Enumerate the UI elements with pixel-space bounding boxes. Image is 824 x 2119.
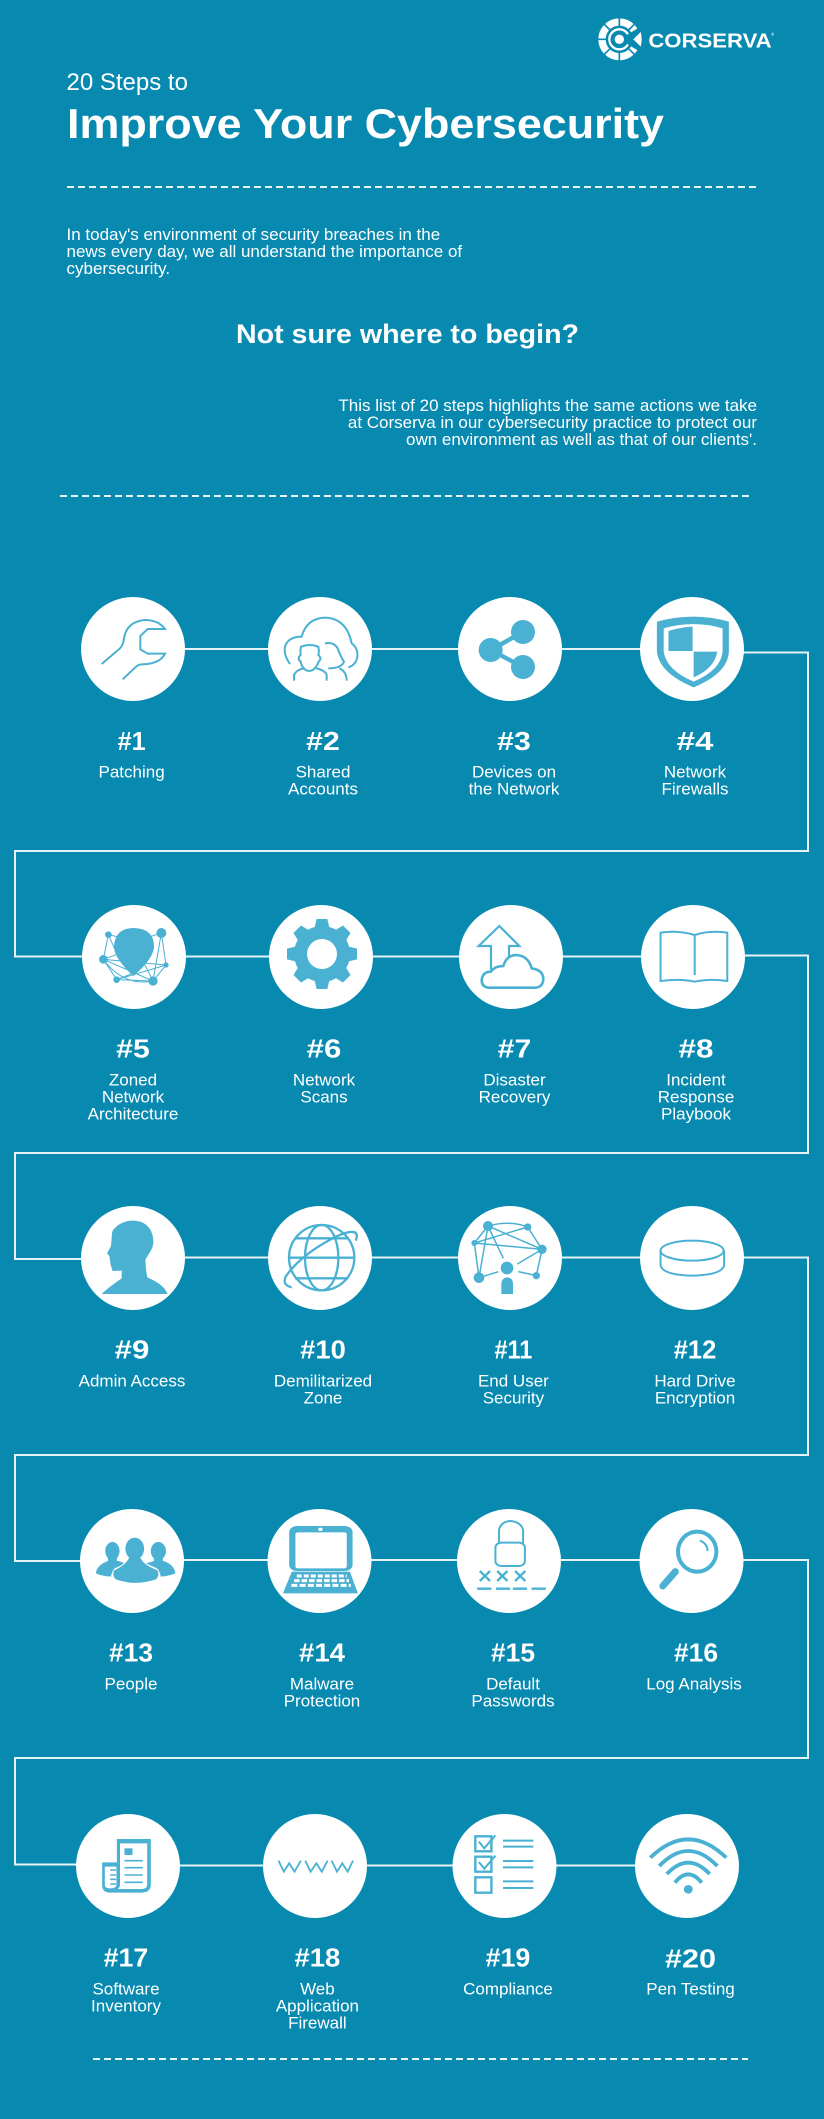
step 7: Disaster Recovery — [459, 905, 563, 1107]
number: #2 — [306, 726, 340, 756]
label: Zone — [304, 1389, 342, 1408]
label: Network — [102, 1088, 165, 1107]
title: Improve Your Cybersecurity — [67, 100, 665, 147]
number: #7 — [498, 1034, 531, 1064]
number: #17 — [104, 1943, 148, 1973]
icon: document — [102, 1839, 151, 1893]
label: Shared — [296, 763, 350, 782]
icon: globe with orbit — [285, 1225, 357, 1290]
label: Application — [276, 1997, 359, 2016]
label: Demilitarized — [274, 1372, 372, 1391]
step 13: People — [80, 1509, 184, 1694]
label: Scans — [300, 1088, 348, 1107]
label: Devices on — [472, 763, 556, 782]
step 17: Software Inventory — [76, 1814, 180, 2016]
step 11: End User Security — [458, 1206, 562, 1408]
number: #9 — [115, 1335, 149, 1365]
intro paragraph: news every day, we all understand the importance of — [66, 242, 462, 261]
logo: Corserva: CORSERVA — [648, 30, 772, 52]
label: Firewall — [288, 2014, 347, 2033]
number: #18 — [295, 1943, 340, 1973]
label: Firewalls — [661, 780, 729, 799]
divider: bottom dashed line — [93, 2058, 748, 2060]
number: #16 — [674, 1637, 718, 1667]
label: End User — [478, 1372, 549, 1391]
step 20: Pen Testing — [635, 1814, 739, 1999]
number: #4 — [677, 726, 714, 756]
label: Malware — [290, 1675, 354, 1694]
label: the Network — [469, 780, 560, 799]
icon: open book — [661, 932, 727, 982]
icon: cloud with users — [285, 618, 357, 681]
step 3: Devices on the Network — [458, 597, 562, 799]
step 6: Network Scans — [269, 905, 373, 1107]
label: Software — [92, 1980, 160, 1999]
number: #15 — [491, 1637, 535, 1667]
label: Disaster — [483, 1071, 546, 1090]
intro paragraph: cybersecurity. — [66, 259, 170, 278]
icon: gear — [287, 919, 357, 989]
logo: Corserva — [598, 18, 775, 61]
icon: laptop — [283, 1526, 358, 1593]
number: #12 — [674, 1335, 716, 1365]
icon: shield — [657, 617, 729, 687]
number: #11 — [494, 1335, 532, 1365]
step 19: Compliance — [452, 1814, 556, 1999]
icon: checklist — [475, 1835, 533, 1893]
label: Encryption — [655, 1389, 735, 1408]
number: #8 — [678, 1034, 714, 1064]
icon: three people — [96, 1538, 175, 1583]
step 12: Hard Drive Encryption — [640, 1206, 744, 1408]
description paragraph: at Corserva in our cybersecurity practice to protect our — [348, 413, 757, 432]
step 16: Log Analysis — [640, 1509, 744, 1694]
label: Architecture — [88, 1105, 178, 1124]
label: Incident — [666, 1071, 726, 1090]
description paragraph: own environment as well as that of our clients'. — [406, 430, 757, 449]
label: Playbook — [661, 1105, 731, 1124]
label: Inventory — [91, 1997, 161, 2016]
icon: magnifying glass — [663, 1532, 716, 1586]
icon: cloud with up arrow — [479, 926, 543, 988]
label: Security — [483, 1389, 545, 1408]
number: #3 — [497, 726, 531, 756]
label: Admin Access — [79, 1372, 185, 1391]
intro paragraph: In today's environment of security breaches in the — [66, 225, 440, 244]
label: People — [105, 1675, 157, 1694]
divider: top dashed line — [67, 186, 757, 188]
label: Protection — [284, 1692, 360, 1711]
step 4: Network Firewalls — [640, 597, 744, 799]
step 9: Admin Access — [79, 1206, 185, 1391]
label: Compliance — [463, 1980, 553, 1999]
number: #14 — [299, 1637, 346, 1667]
step 18: Web Application Firewall — [263, 1814, 367, 2033]
number: #20 — [665, 1944, 716, 1974]
step 5: Zoned Network Architecture — [82, 905, 186, 1124]
icon: network pin — [99, 928, 169, 986]
label: Network — [293, 1071, 356, 1090]
step 2: Shared Accounts — [268, 597, 372, 799]
label: Hard Drive — [654, 1372, 736, 1391]
label: Web — [300, 1980, 335, 1999]
label: Network — [664, 763, 727, 782]
header: subtitle: 20 Steps to — [66, 69, 188, 96]
step 15: Default Passwords — [457, 1509, 561, 1711]
number: #10 — [300, 1335, 346, 1365]
icon: head silhouette — [102, 1221, 167, 1294]
icon: padlock with password — [477, 1521, 546, 1589]
label: Passwords — [471, 1692, 555, 1711]
heading: not sure where to begin: Not sure where to begin? — [236, 319, 579, 349]
icon: disc — [661, 1241, 724, 1276]
number: #1 — [118, 726, 146, 756]
label: Accounts — [288, 780, 358, 799]
label: Zoned — [109, 1071, 157, 1090]
step 14: Malware Protection — [268, 1509, 372, 1711]
label: Patching — [99, 763, 165, 782]
divider: second dashed line — [60, 495, 751, 497]
label: Log Analysis — [646, 1675, 742, 1694]
number: #19 — [486, 1943, 530, 1973]
icon: share nodes — [479, 620, 535, 679]
step 8: Incident Response Playbook — [641, 905, 745, 1124]
number: #13 — [109, 1637, 153, 1667]
label: Recovery — [479, 1088, 551, 1107]
number: #6 — [307, 1034, 341, 1064]
icon: www — [278, 1861, 353, 1872]
description paragraph: This list of 20 steps highlights the same actions we take — [338, 396, 757, 415]
connector path linking all steps — [15, 649, 808, 1866]
number: #5 — [116, 1034, 150, 1064]
icon: wifi — [650, 1839, 726, 1894]
logo: Corserva: ® — [771, 32, 775, 37]
label: Response — [658, 1088, 734, 1107]
label: Pen Testing — [646, 1980, 735, 1999]
step 10: Demilitarized Zone — [268, 1206, 372, 1408]
step 1: Patching — [81, 597, 185, 782]
label: Default — [486, 1675, 540, 1694]
icon: user in network — [471, 1221, 547, 1294]
icon: wrench — [102, 620, 165, 679]
